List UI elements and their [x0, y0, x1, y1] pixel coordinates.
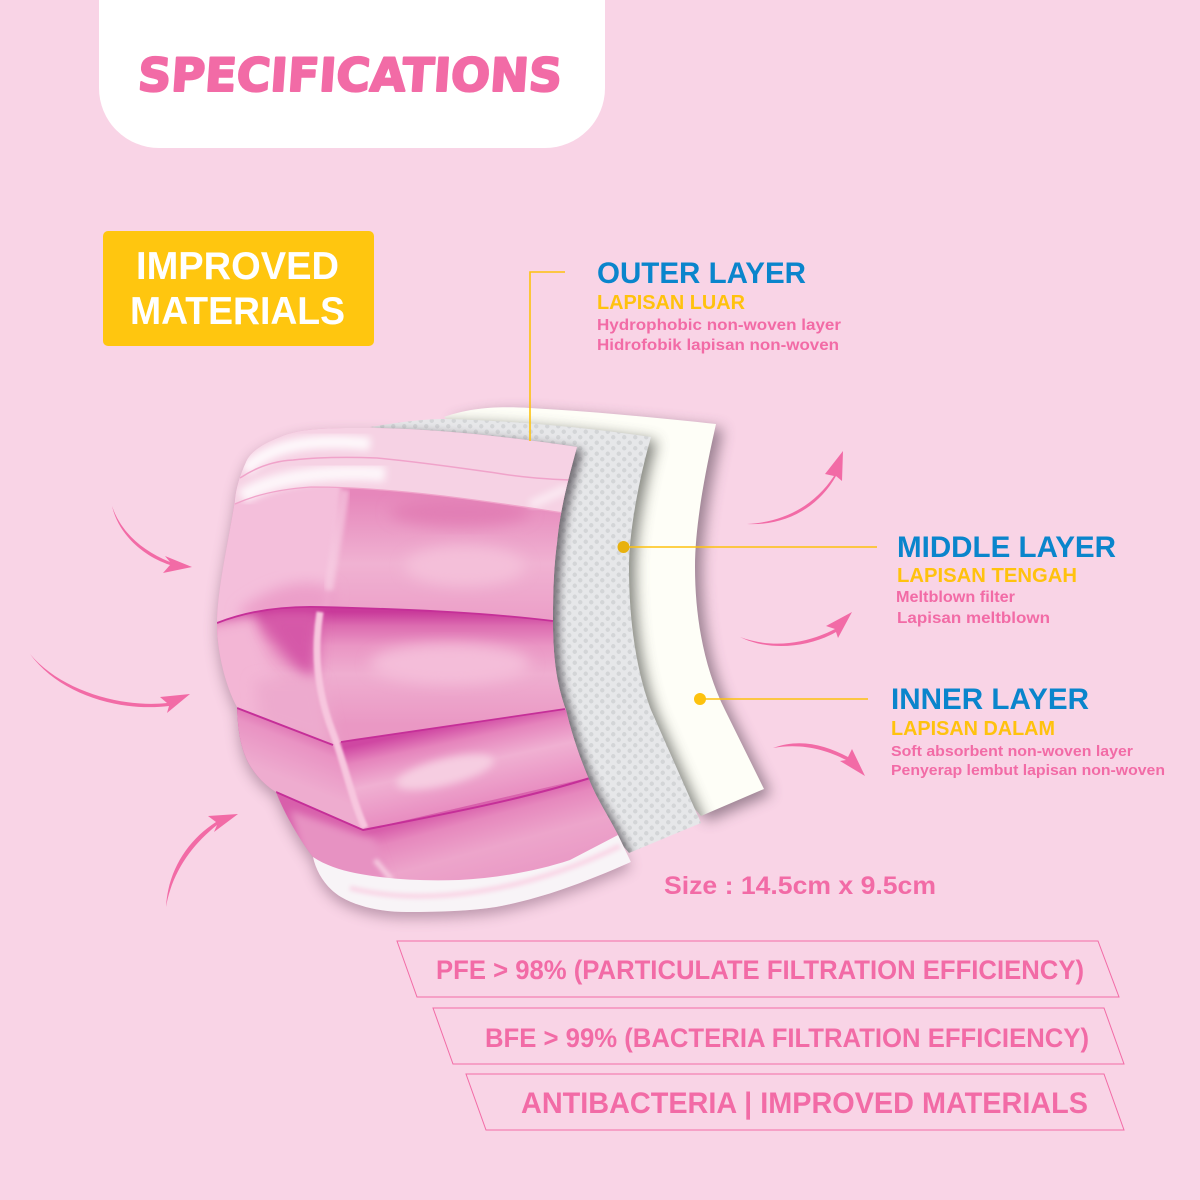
middle layer sheet: [370, 419, 707, 857]
arrow: middle right: [740, 612, 852, 646]
text: outer layer: LAPISAN LUAR: [597, 292, 746, 314]
text: inner layer: [891, 683, 1165, 779]
text: inner layer: Soft absorbent non-woven layer: [891, 743, 1133, 760]
top band: [235, 428, 577, 512]
spec banner: BFE: [433, 1008, 1124, 1064]
spec banner: PFE: PFE > 98% (PARTICULATE FILTRATION EFFICIENCY): [436, 955, 1084, 985]
text: outer layer: Hidrofobik lapisan non-woven: [597, 337, 839, 354]
text: inner layer: LAPISAN DALAM: [891, 718, 1055, 740]
spec banner: PFE: [397, 941, 1119, 997]
arrow: middle left: [30, 654, 190, 713]
title card: [99, 0, 605, 148]
inner layer sheet: [444, 407, 771, 821]
spec banner: antibacteria: [466, 1074, 1124, 1130]
upper panel: [336, 480, 568, 608]
size label: Size : 14.5cm x 9.5cm: [664, 872, 936, 900]
arrow: lower left: [166, 814, 238, 907]
arrow: upper left: [112, 506, 192, 573]
leader line: outer layer: [530, 272, 565, 441]
badge: improved materials: MATERIALS: [130, 290, 345, 333]
leader line: middle layer: [618, 541, 877, 553]
text: inner layer: INNER LAYER: [891, 683, 1089, 716]
text: middle layer: Meltblown filter: [896, 589, 1015, 606]
leader line: inner layer: [694, 693, 868, 705]
second panel: [217, 608, 566, 741]
pleat lines: [217, 607, 553, 623]
spec banner: BFE: BFE > 99% (BACTERIA FILTRATION EFFICIENCY): [485, 1023, 1089, 1053]
arrow: lower right: [773, 743, 865, 776]
text: middle layer: [896, 531, 1116, 627]
fourth panel: [276, 778, 624, 878]
text: middle layer: MIDDLE LAYER: [897, 531, 1116, 564]
text: inner layer: Penyerap lembut lapisan non-woven: [891, 762, 1165, 779]
arrow: upper right: [747, 451, 843, 524]
title card: SPECIFICATIONS: [136, 48, 564, 102]
text: outer layer: [597, 257, 841, 354]
text: middle layer: LAPISAN TENGAH: [897, 565, 1077, 587]
text: outer layer: Hydrophobic non-woven layer: [597, 317, 841, 334]
spec banner: antibacteria: ANTIBACTERIA | IMPROVED MATERIALS: [521, 1087, 1088, 1120]
outer layer mask: [200, 420, 650, 925]
badge: improved materials: [103, 231, 374, 346]
fold crease: [329, 490, 345, 590]
third panel: [237, 709, 588, 829]
mask illustration: [200, 407, 771, 925]
bottom band: [313, 835, 631, 912]
text: outer layer: OUTER LAYER: [597, 257, 806, 290]
text: middle layer: Lapisan meltblown: [897, 610, 1050, 627]
badge: improved materials: IMPROVED: [136, 245, 339, 288]
